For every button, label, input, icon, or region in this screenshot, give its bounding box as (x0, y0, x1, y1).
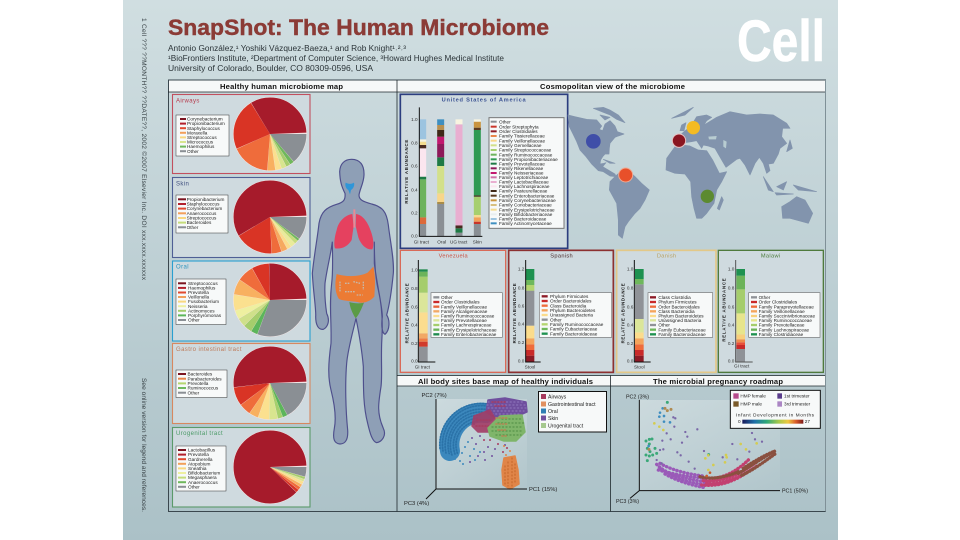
tick labels: 0.6 (411, 164, 418, 169)
legend: skin: Staphylococcus (187, 202, 220, 207)
axes (426, 399, 527, 499)
axis labels: PC2 (3%) (626, 394, 649, 400)
authors and affiliations: University of Colorado, Boulder, CO 80309-0596, USA (168, 64, 374, 73)
authors and affiliations: Antonio González,¹ Yoshiki Vázquez-Baeza,¹ and Rob Knight¹˒²˒³ (168, 44, 406, 53)
heading: pregnancy roadmap: The microbial pregnancy roadmap (653, 377, 783, 386)
legend: Phylum Bacteroidetes (658, 314, 704, 319)
page background (123, 0, 838, 540)
legend: Family Paraprevotellaceae (759, 304, 814, 309)
scatter: pregnancy roadmap (616, 390, 820, 505)
tick labels (518, 267, 525, 363)
legend: 1st trimester (784, 394, 810, 399)
legend: USA families: Family Enterobacteriaceae (499, 193, 555, 198)
legend: skin: Other (187, 225, 199, 230)
legend: airways: Other (187, 149, 199, 154)
points: infant early (646, 402, 709, 461)
legend: USA families: Family Prevotellaceae (499, 161, 545, 166)
organ: urogenital tract (349, 302, 364, 318)
tick labels: 0.2 (728, 341, 735, 346)
legend: skin: Bacteroides (187, 220, 212, 225)
axes (419, 107, 482, 236)
site: USA (586, 134, 601, 149)
points: trimester samples along curve (646, 402, 776, 487)
axes (630, 400, 780, 498)
legend (749, 293, 820, 337)
tick labels (411, 117, 418, 239)
legend (539, 293, 612, 337)
legend: airways: Streptococcus (187, 135, 217, 140)
legend: Family Ruminococcaceae (759, 318, 812, 323)
legend (730, 390, 820, 428)
heading: Spanish (550, 253, 573, 259)
tick labels: 1.2 (518, 267, 525, 272)
tick labels: 0.4 (728, 323, 735, 328)
tick labels (728, 267, 735, 363)
legend: Order Clostridiales (441, 300, 480, 305)
site: Denmark (687, 121, 700, 134)
charts: Danish and Malawi (617, 250, 823, 372)
points: skin (470, 398, 527, 462)
plot backdrop (436, 399, 527, 489)
legend: Airways (548, 394, 567, 400)
legend: oral: Prevotella (188, 290, 209, 295)
legend: Class Bacteroidia (658, 309, 695, 314)
tick labels: 0.8 (728, 285, 735, 290)
legend: USA families: Family Streptococcaceae (499, 148, 552, 153)
heading: all body sites: All body sites base map of healthy individuals (418, 377, 593, 386)
legend: Other (658, 323, 670, 328)
legend: Family Alcaligenaceae (441, 309, 488, 314)
title: SnapShot: The Human Microbiome (168, 15, 549, 40)
legend: Family Veillonellaceae (759, 309, 805, 314)
x labels: GI tract (414, 239, 430, 244)
x label: Stool (634, 365, 645, 370)
legend: USA families: Family Ruminococcaceae (499, 152, 553, 157)
legend: airways (176, 115, 229, 156)
stacked bars (423, 119, 477, 236)
tick labels: 0.6 (627, 304, 634, 309)
axes (418, 260, 435, 362)
points: airways (472, 402, 507, 452)
authors and affiliations: ¹BioFrontiers Institute, ²Department of Computer Science, ³Howard Hughes Medical Institute (168, 54, 505, 63)
tick labels: 0.0 (518, 358, 525, 363)
continents (568, 107, 817, 238)
axis label: RELATIVE ABUNDANCE (405, 283, 410, 343)
legend: urogenital: Sneathia (188, 466, 207, 471)
legend (431, 293, 502, 337)
legend: Unassigned Bacteria (550, 313, 593, 318)
tick labels: 0.4 (627, 323, 634, 328)
heading: gastrointestinal tract: Gastro intestinal tract (176, 347, 242, 353)
legend: Family Lachnospiraceae (759, 327, 810, 332)
legend: USA families: Family Lachnospiraceae (499, 184, 550, 189)
axis label: RELATIVE ABUNDANCE (512, 283, 517, 343)
legend: skin: Propionibacterium (187, 197, 224, 202)
panel: Danish (617, 250, 716, 372)
legend: Family Ruminococcaceae (550, 322, 604, 327)
legend: HMP female (740, 394, 766, 399)
points: urogenital (488, 415, 525, 441)
main frame and section headers (168, 80, 826, 512)
legend: skin: Corynebacterium (187, 206, 222, 211)
charts: Venezuela and Spanish (400, 250, 613, 372)
panel: Venezuela (400, 250, 506, 372)
axis labels: PC3 (3%) (616, 499, 639, 505)
legend: USA families: Family Veillonellaceae (499, 138, 545, 143)
legend: Family Veillonellaceae (441, 304, 487, 309)
legend: oral: Streptococcus (188, 281, 218, 286)
legend: USA families: Family Erysipelotrichaceae (499, 207, 555, 212)
legend: skin (176, 195, 228, 233)
tick labels: 0.8 (411, 286, 418, 291)
pie: oral (233, 263, 307, 337)
tick labels: 0.6 (518, 304, 525, 309)
pie: skin (233, 180, 307, 254)
x label: GI tract (415, 365, 431, 370)
heading: Malawi (761, 253, 780, 259)
legend: Family Eubacteriaceae (550, 327, 598, 332)
tick labels: 1.0 (411, 268, 418, 273)
organ: intestines (335, 267, 375, 303)
legend: urogenital: Gardnerella (188, 457, 213, 462)
legend: Oral (548, 409, 558, 415)
panel: USA chart (400, 94, 568, 248)
legend: airways: Propionibacterium (187, 121, 225, 126)
legend: urogenital: Lactobacillus (188, 448, 216, 453)
side note: online version: See online version for legend and references. (140, 378, 147, 512)
points: oral (440, 404, 487, 464)
organ: lungs (334, 209, 373, 249)
legend: gastrointestinal: Ruminococcus (188, 386, 219, 391)
axis label: RELATIVE ABUNDANCE (722, 278, 727, 342)
heading: airways: Airways (176, 98, 200, 104)
legend: urogenital: Atopobium (188, 461, 211, 466)
legend: Phylum Bacteroidetes (550, 308, 596, 313)
heading: oral: Oral (176, 264, 189, 270)
heading: skin: Skin (176, 182, 189, 188)
heading: urogenital tract: Urogenital tract (176, 431, 223, 437)
legend: Family Lachnospiraceae (441, 323, 492, 328)
legend: Phylum Firmicutes (550, 294, 589, 299)
legend: USA families: Family Bacteroidaceae (499, 217, 547, 222)
legend: Skin (548, 416, 558, 422)
legend: oral (176, 279, 226, 324)
heading: Venezuela (439, 253, 469, 259)
legend: Family Prevotellaceae (441, 318, 487, 323)
legend: Family Ruminococcaceae (441, 314, 495, 319)
legend: Family Prevotellaceae (759, 323, 805, 328)
legend: Order Bacteroidales (550, 299, 592, 304)
panel: gastrointestinal tract (172, 344, 310, 424)
tick labels: 0.0 (728, 358, 735, 363)
legend: USA families: Family Bifidobacteriaceae (499, 212, 553, 217)
tick labels: 0.2 (411, 210, 418, 215)
legend: Infant Development in Months (736, 413, 815, 418)
points: sparse purple (657, 417, 762, 469)
world map (568, 107, 817, 238)
pie: urogenital (233, 430, 307, 504)
legend: urogenital: Prevotella (188, 452, 209, 457)
legend: urogenital (176, 446, 226, 491)
panel: Malawi (718, 250, 823, 372)
legend: Phylum Firmicutes (658, 300, 697, 305)
legend: Class Clostridia (658, 295, 691, 300)
legend: Order Clostridiales (759, 300, 798, 305)
legend: USA families: Family Actinomycetaceae (499, 221, 552, 226)
site: Spain (672, 134, 686, 147)
stacked bar (517, 269, 543, 362)
legend: urogenital: Bifidobacterium (188, 471, 220, 476)
legend: USA families: Family Pasteurellaceae (499, 189, 548, 194)
tick labels: 0.4 (411, 188, 418, 193)
tick labels: 0.8 (411, 140, 418, 145)
tick labels: 1.0 (728, 267, 735, 272)
stacked bar (728, 269, 754, 362)
axes (634, 260, 651, 362)
legend: airways: Micrococcus (187, 140, 214, 145)
legend: oral: Haemophilus (188, 286, 216, 290)
tick labels: 0.0 (411, 234, 418, 239)
legend: Urogenital tract (548, 424, 584, 430)
legend: oral: Porphyromonas (188, 313, 222, 318)
tick labels: 0.8 (518, 285, 525, 290)
legend: USA families: Family Corynebacteriaceae (499, 198, 556, 203)
legend: skin: Anaerococcus (187, 211, 217, 216)
legend: Family Eubacteriaceae (658, 327, 706, 332)
legend: Unassigned Bacteria (658, 318, 702, 323)
axes (526, 260, 541, 362)
legend: Family Clostridiaceae (759, 332, 804, 337)
tick labels: 0.0 (627, 358, 634, 363)
legend: USA families: Family Lactobacillaceae (499, 180, 549, 185)
legend: Other (550, 317, 562, 322)
human body figure (312, 159, 393, 444)
legend: urogenital: Anaerococcus (188, 480, 218, 485)
tick labels: 0.2 (411, 341, 418, 346)
legend: USA families: Other (499, 119, 511, 124)
legend: oral: Actinomyces (188, 308, 215, 313)
x labels: Oral (437, 239, 446, 244)
legend: airways: Moraxella (187, 130, 208, 135)
tick labels (411, 268, 418, 363)
scatter: all body sites base map (404, 392, 606, 507)
axis label: RELATIVE ABUNDANCE (404, 140, 409, 204)
tick labels (627, 267, 634, 363)
site: Malawi (701, 190, 714, 203)
legend: airways: Corynebacterium (187, 117, 223, 122)
legend: 0 (738, 419, 741, 424)
panel: urogenital tract (172, 428, 310, 507)
legend: oral: Other (188, 318, 200, 323)
heading: Danish (657, 253, 676, 259)
legend: USA families: Family Tissierellaceae (499, 134, 545, 139)
axes (736, 260, 753, 362)
axis labels: PC3 (4%) (404, 501, 429, 507)
legend: airways: Haemophilus (187, 144, 215, 149)
pie: gastrointestinal (233, 346, 307, 420)
axis labels (616, 394, 808, 505)
tick labels: 0.4 (518, 322, 525, 327)
axis labels (404, 393, 557, 507)
panel: skin (172, 178, 310, 258)
legend: Family Bacteroidaceae (658, 332, 706, 337)
axis labels: PC1 (50%) (782, 489, 808, 495)
points: infant late (654, 423, 757, 470)
legend: oral: Veillonella (188, 295, 210, 300)
legend: oral: Fusobacterium (188, 299, 219, 304)
axis labels: PC2 (7%) (422, 393, 447, 399)
legend: skin: Streptococcus (187, 216, 217, 221)
legend: gastrointestinal: Bacteroides (188, 372, 213, 377)
legend: USA families: Family Coriobacteriaceae (499, 203, 552, 208)
legend: 3rd trimester (784, 402, 811, 407)
legend: gastrointestinal: Other (188, 390, 200, 395)
tick labels: 0.2 (518, 340, 525, 345)
heading: cosmopolitan view: Cosmopolitan view of the microbiome (540, 82, 685, 91)
tick labels: 0.0 (411, 358, 418, 363)
tick labels: 0.4 (411, 323, 418, 328)
points: gastrointestinal (502, 446, 519, 489)
legend: Family Bacteroidaceae (550, 331, 598, 336)
legend (538, 392, 606, 432)
legend: USA families: Family Rikenellaceae (499, 166, 544, 171)
legend: Other (441, 295, 453, 300)
legend: Family Succinivibrionaceae (759, 314, 815, 319)
legend: USA families: Family Gemellaceae (499, 143, 542, 148)
panel: oral (172, 261, 310, 341)
site: Venezuela (619, 168, 633, 182)
legend: 27 (805, 419, 810, 424)
legend: Order Bacteroidales (658, 304, 700, 309)
heading: USA: United States of America (442, 98, 527, 104)
legend: gastrointestinal: Parabacteroides (188, 376, 222, 381)
tick labels: 0.6 (411, 304, 418, 309)
legend: gastrointestinal (176, 370, 227, 398)
legend: USA families: Order Clostridiales (499, 129, 538, 134)
x label: GI tract (734, 364, 750, 369)
legend: Other (759, 295, 771, 300)
axis labels: PC1 (15%) (529, 487, 557, 493)
tick labels: 0.2 (627, 341, 634, 346)
legend: Family Erysipelotrichaceae (441, 327, 497, 332)
tick labels: 0.8 (627, 285, 634, 290)
legend: urogenital: Other (188, 484, 200, 489)
legend: Class Bacteroidia (550, 303, 587, 308)
organ: mouth and throat (345, 183, 354, 194)
legend: urogenital: Megasphaera (188, 475, 217, 480)
x labels: Skin (473, 239, 482, 244)
stacked bar (410, 269, 436, 362)
legend: USA families: Order Streptophyta (499, 124, 539, 129)
plot backdrop (639, 400, 780, 491)
tick labels: 1.0 (411, 117, 418, 122)
authors and affiliations (168, 44, 505, 73)
legend: USA families (489, 118, 564, 228)
side note: citation: 1 Cell ??? ??MONTH?? ??DATE??, 2002 ©2007 Elsevier Inc. DOI xxx.xxxx.xxxxxx (140, 18, 148, 281)
legend: airways: Staphylococcus (187, 126, 220, 131)
stacked bar (626, 269, 652, 362)
legend: gastrointestinal: Prevotella (188, 381, 209, 386)
legend: Family Enterobacteriaceae (441, 332, 497, 337)
panel: airways (172, 94, 310, 174)
x labels: UG tract (450, 239, 468, 244)
legend: USA families: Family Propionibacteriaceae (499, 157, 558, 162)
Cell logo: Cell (737, 9, 825, 74)
inland seas (708, 136, 727, 148)
body outline (312, 159, 393, 444)
legend: USA families: Family Neisseriaceae (499, 171, 544, 176)
legend: oral: Neisseria (188, 304, 208, 309)
legend: HMP male (740, 402, 762, 407)
panel: Spanish (509, 250, 613, 372)
axis label: RELATIVE ABUNDANCE (620, 283, 625, 343)
x label: Stool (525, 365, 535, 370)
pie: airways (233, 97, 307, 171)
tick labels: 1.0 (627, 267, 634, 272)
x labels (414, 239, 482, 244)
legend: USA families: Family Leptotrichiaceae (499, 175, 549, 180)
heading: healthy human microbiome map: Healthy human microbiome map (220, 82, 343, 91)
legend: Gastrointestinal tract (548, 402, 596, 408)
tick labels: 0.6 (728, 304, 735, 309)
legend (648, 293, 713, 337)
